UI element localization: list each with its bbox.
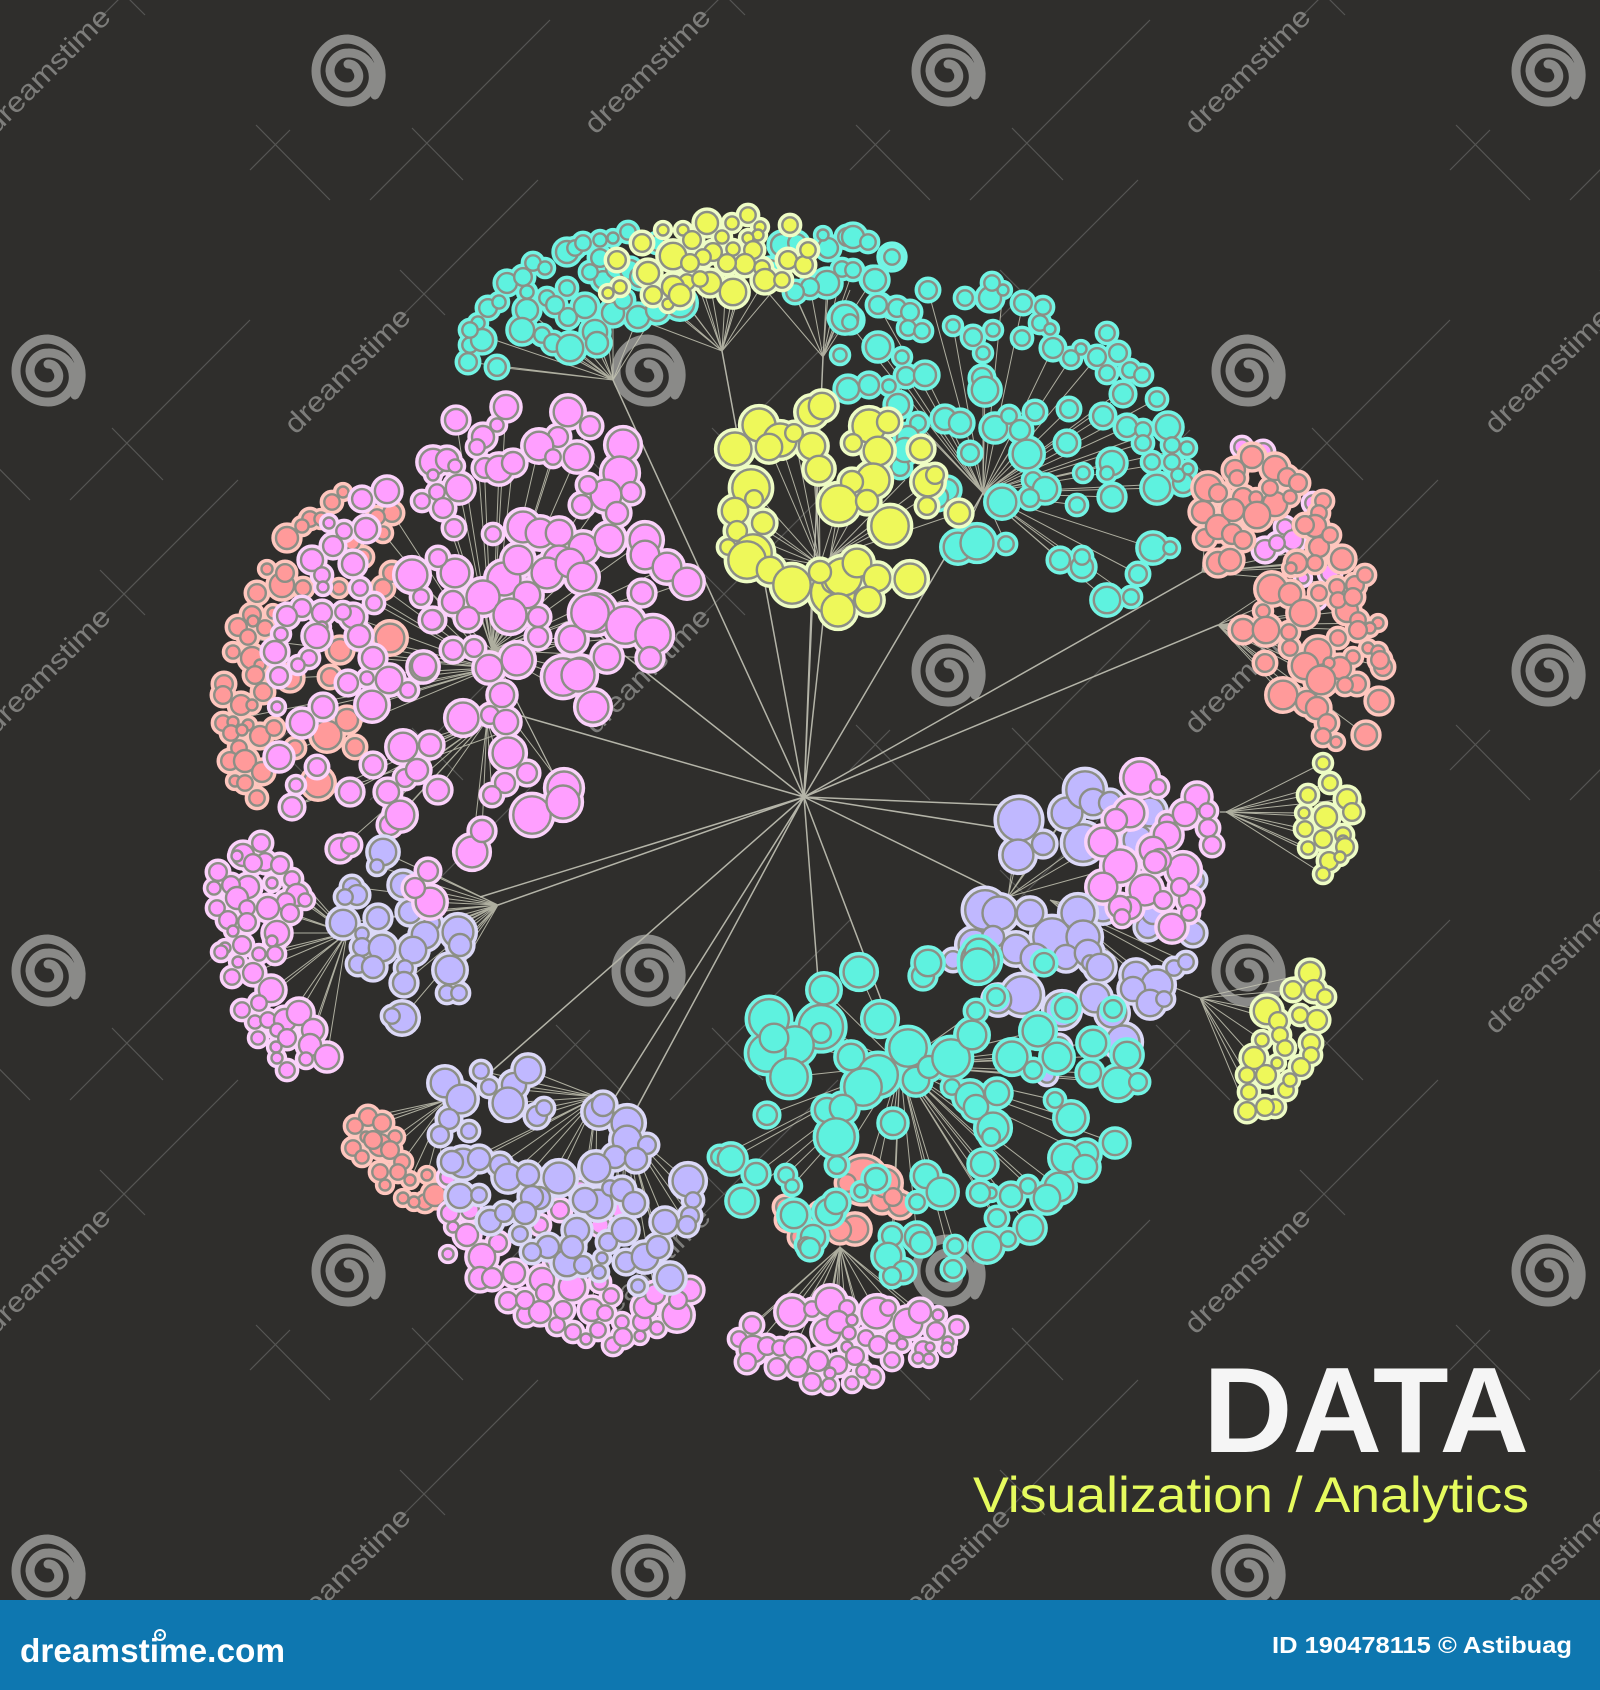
cluster: middle lavender [944, 890, 1194, 1083]
fan lines: bottom cyan hub [720, 972, 1138, 1276]
fan lines: bottom pink hub [739, 1247, 936, 1385]
watermark text: dreamstime [578, 601, 717, 740]
fan lines: large cyan hub [845, 290, 1187, 600]
cluster: left salmon [214, 486, 404, 806]
cluster: bottom pink [731, 1288, 965, 1392]
cluster: large cyan upper right [832, 249, 1194, 613]
cluster: large pink upper left [264, 395, 701, 867]
cluster: right yellow lower [1238, 962, 1333, 1120]
watermark text: dreamstime [1478, 301, 1600, 440]
watermark text: dreamstime [1178, 1201, 1317, 1340]
fan lines: lavender right hubs [1008, 790, 1193, 985]
watermark text: dreamstime [278, 301, 417, 440]
cluster: lower left salmon [345, 1108, 446, 1210]
cluster: top cyan left [459, 224, 694, 376]
cluster: bottom cyan [711, 939, 1147, 1285]
cluster: top yellow [602, 207, 816, 310]
cluster: lower left lavender [431, 1057, 703, 1293]
radial trunk lines from centre [480, 351, 1218, 1128]
cluster: left lavender [330, 839, 473, 1032]
cluster: right lavender [998, 771, 1204, 944]
watermark text: dreamstime [1178, 601, 1317, 740]
cluster: inner yellow [718, 393, 970, 626]
cluster: far left pink [207, 834, 339, 1078]
subtitle: Visualization / Analytics [973, 1467, 1529, 1523]
watermark text: dreamstime [1478, 901, 1600, 1040]
fan lines: pink upper hub [230, 407, 687, 757]
watermark text: dreamstime [278, 1501, 417, 1640]
cluster: top cyan right [760, 226, 903, 331]
fan lines: lower left hubs [355, 1070, 693, 1315]
watermark text: dreamstime [1478, 1501, 1600, 1640]
fan lines: top cyan hub [468, 280, 657, 380]
fan lines: pink lower hub [292, 718, 564, 852]
watermark text: dreamstime [878, 1501, 1017, 1640]
fan lines: salmon hubs [1202, 515, 1383, 742]
cluster: right salmon [1192, 446, 1392, 748]
fan lines: right yellow hubs [1200, 763, 1347, 1111]
cluster: right yellow upper [1297, 756, 1361, 881]
watermark text: dreamstime [578, 1201, 717, 1340]
cluster: salmon under bottom cyan [776, 1158, 911, 1246]
fan lines: top yellow hub [640, 250, 782, 351]
title: DATA [1203, 1342, 1529, 1478]
footer image id: ID 190478115 © Astibuag [1272, 1632, 1572, 1658]
footer band [0, 1600, 1600, 1690]
secondary branch lines [500, 668, 1227, 998]
fan lines: top right cyan hub [770, 269, 873, 357]
fan lines: left lavender hub [343, 852, 498, 1018]
watermark text: dreamstime [1178, 1, 1317, 140]
cluster: pink under right salmon [1234, 439, 1339, 607]
watermark text: dreamstime [578, 1, 717, 140]
fan lines: inner yellow hub [735, 412, 959, 570]
footer logo: dreamstime.com [20, 1632, 285, 1669]
cluster: small pink over lavender [405, 861, 444, 916]
cluster: right pink [1089, 761, 1221, 940]
fan lines: left pink hub [237, 856, 347, 1057]
cluster: lower left pink [440, 1169, 701, 1353]
